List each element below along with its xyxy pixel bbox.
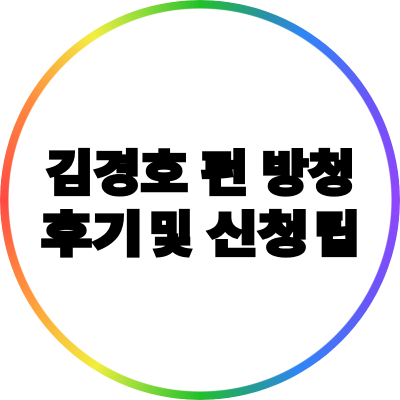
title line 2: [41, 209, 360, 262]
title line 2: 후기: [41, 209, 143, 262]
title line 2: 신청: [207, 209, 309, 262]
title line 1: 방청: [262, 148, 355, 201]
title line 2: 팁: [314, 209, 360, 262]
title line 1: 김경호: [46, 148, 188, 201]
title line 1: 펀: [201, 148, 248, 201]
title line 2: 및: [149, 209, 193, 262]
title line 1: [46, 148, 355, 201]
